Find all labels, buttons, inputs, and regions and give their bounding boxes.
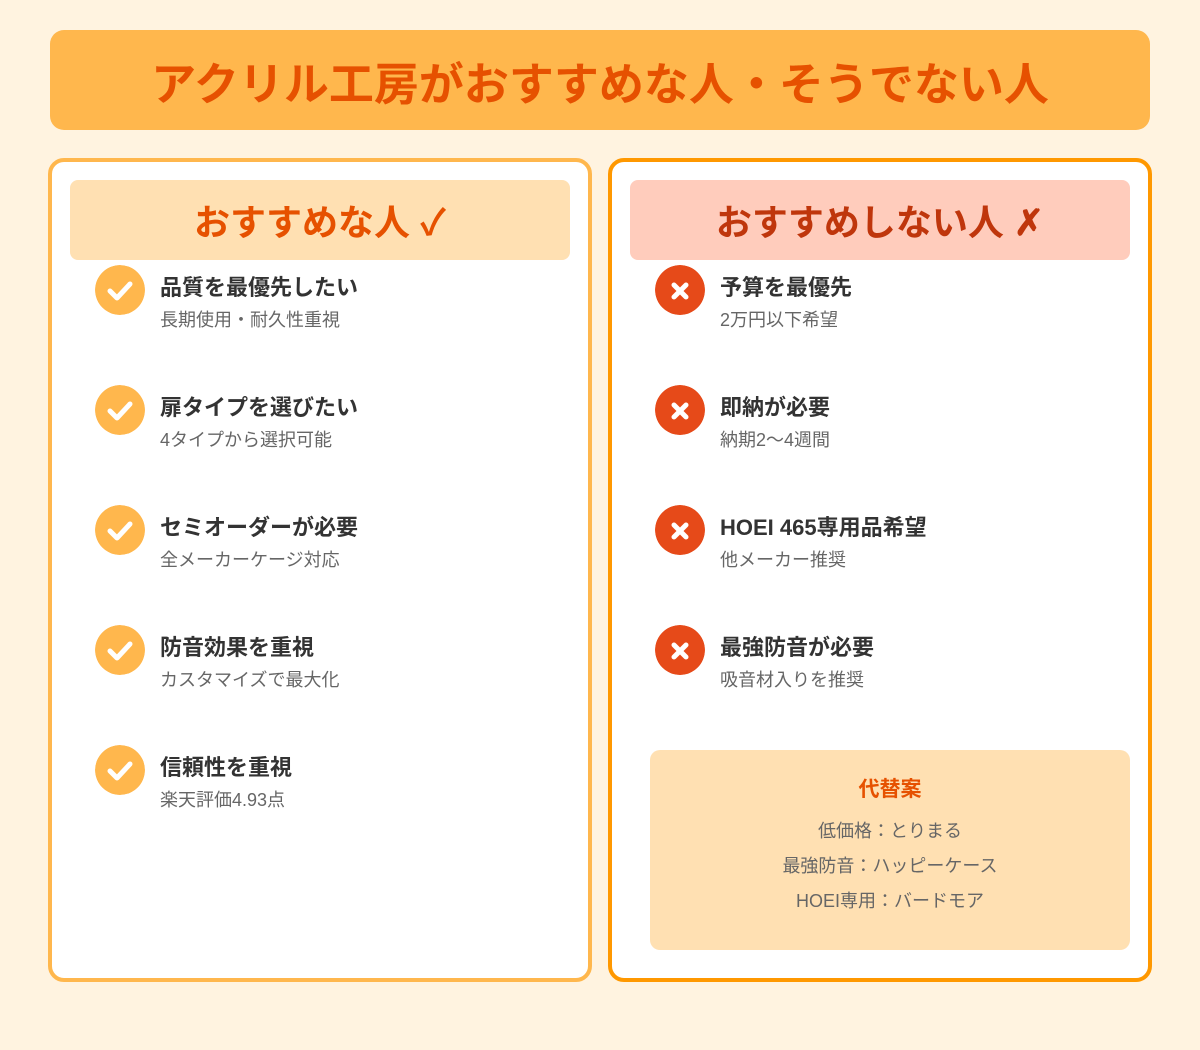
item 2: 納期2～4週間 <box>720 430 830 450</box>
heading: recommended: おすすめな人 ✓ <box>194 202 446 243</box>
item 1 <box>95 265 358 330</box>
item 5: 楽天評価4.93点 <box>160 790 285 810</box>
item 2: 即納が必要 <box>720 395 830 420</box>
item 2: 4タイプから選択可能 <box>160 430 332 450</box>
item 1: 予算を最優先 <box>720 275 852 300</box>
title: アクリル工房がおすすめな人・そうでない人 <box>151 58 1049 110</box>
item 4: 防音効果を重視 <box>160 635 314 660</box>
heading: not recommended: おすすめしない人 ✗ <box>716 202 1044 243</box>
item 1: 2万円以下希望 <box>720 310 838 330</box>
item 5 <box>95 745 292 810</box>
item 1 <box>655 265 852 330</box>
item 4: 吸音材入りを推奨 <box>720 670 864 690</box>
item 4: カスタマイズで最大化 <box>160 670 339 690</box>
item 1: 品質を最優先したい <box>160 275 358 300</box>
callout: alternatives: 代替案 <box>858 778 922 801</box>
item 3 <box>655 505 927 570</box>
callout: alternatives: 最強防音：ハッピーケース <box>782 856 998 876</box>
callout: alternatives: 低価格：とりまる <box>818 821 962 841</box>
panel: recommended <box>48 158 592 982</box>
item 4 <box>655 625 874 690</box>
item 5: 信頼性を重視 <box>160 755 292 780</box>
item 2: 扉タイプを選びたい <box>160 395 358 420</box>
heading: not recommended <box>630 180 1130 260</box>
item 2 <box>655 385 830 450</box>
item 2 <box>95 385 358 450</box>
item 3 <box>95 505 358 570</box>
heading: recommended <box>70 180 570 260</box>
panel: not recommended <box>608 158 1152 982</box>
item 4: 最強防音が必要 <box>720 635 874 660</box>
item 3: セミオーダーが必要 <box>160 515 358 540</box>
callout: alternatives <box>650 750 1130 950</box>
item 3: 全メーカーケージ対応 <box>160 550 340 570</box>
item 4 <box>95 625 339 690</box>
item 3: 他メーカー推奨 <box>720 550 846 570</box>
item 1: 長期使用・耐久性重視 <box>160 310 340 330</box>
callout: alternatives: HOEI専用：バードモア <box>796 891 984 911</box>
item 3: HOEI 465専用品希望 <box>720 515 927 540</box>
title <box>50 30 1150 130</box>
